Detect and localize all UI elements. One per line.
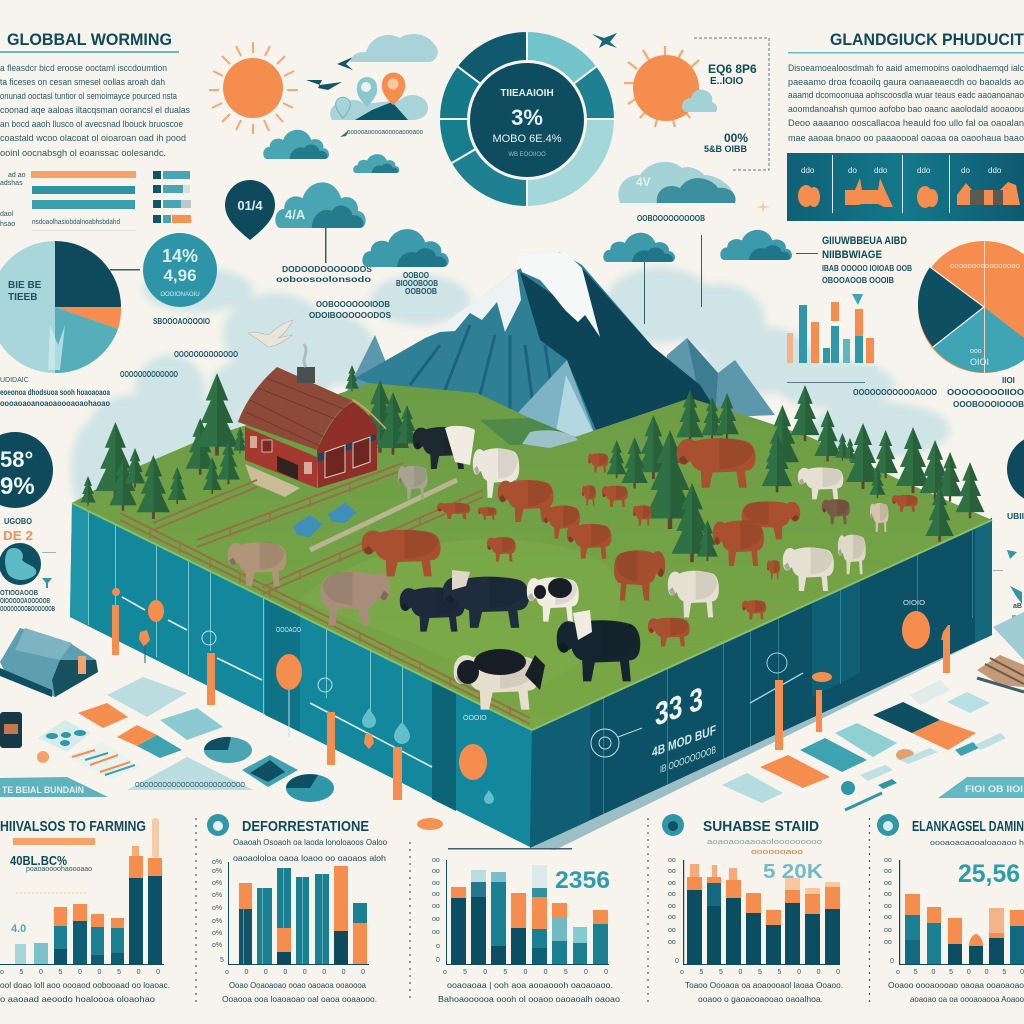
- chart panel 4: sustainable stand: oo: [668, 939, 676, 946]
- heading: right mid: IBAB OOOOO IOIOAB OOB: [822, 264, 912, 273]
- icon: orange sun left: [209, 42, 298, 134]
- small legend bars: [0, 171, 191, 231]
- chart panel 4: sustainable stand: oo: [668, 903, 676, 910]
- chart panel 3: 0: [436, 957, 440, 964]
- banner: lower left: TE BEIAL BUNDAIN: [2, 785, 84, 795]
- chart panel 2: deforestation: o%: [212, 868, 222, 875]
- barn: [238, 344, 386, 497]
- tractor: lower left: [0, 712, 22, 748]
- connector and labels under cloud: OOBOOB: [405, 287, 437, 296]
- cloud with percentage: 4/A: [285, 207, 306, 222]
- bars: [15, 818, 162, 965]
- chart panel 4: sustainable stand: 0: [675, 958, 679, 965]
- connector and labels under cloud: OOOOOOOOOOOOO: [174, 350, 238, 359]
- stats beside sun: [694, 38, 769, 170]
- chart panel 5: oo: [884, 903, 892, 910]
- separators: [196, 818, 870, 1003]
- chart panel 5: oo: [884, 880, 892, 887]
- label and globe: left edge: OOOOOOOOBOOOOOOB: [0, 606, 55, 613]
- stat circle and icons: right edge: [993, 435, 1024, 622]
- stats beside sun: EQ6 8P6: [708, 62, 757, 76]
- stats beside sun: 00%: [724, 131, 748, 145]
- cloud: pale top: [350, 34, 438, 62]
- pale cloud backdrop behind mountain: [71, 267, 950, 520]
- title: global warming: GLOBBAL WORMING: [7, 30, 172, 49]
- platform: left wall: [70, 503, 532, 848]
- chart panel 4: sustainable stand: o 5 5 0 5 5 0 0 0: [680, 969, 840, 976]
- left wall icons and pins: [112, 588, 494, 804]
- chart panel 2: deforestation: o%: [212, 905, 222, 912]
- cloud with map pins: [330, 72, 428, 120]
- chart panel 3: oo: [432, 857, 440, 864]
- right wall icons and pins: [750, 600, 950, 750]
- text block: right paragraph: [788, 63, 1024, 143]
- small vehicles: [293, 503, 357, 537]
- chart panel 3: oo: [432, 929, 440, 936]
- pie chart: left: [0, 241, 121, 373]
- chart panel 5: [877, 814, 1024, 1004]
- chart panel 1: invasion to farming: 40BL.BC%: [10, 853, 67, 868]
- chart panel 2: deforestation: o%: [212, 892, 222, 899]
- banner: livestock strip: ddo: [917, 166, 931, 175]
- chart panel 3: oo: [432, 891, 440, 898]
- donut chart: [439, 31, 615, 207]
- label under callout: SBOOOAOOOOIO: [153, 317, 210, 326]
- chart panel 3: oo: [432, 880, 440, 887]
- panel heading: SUHABSE STAIID: [703, 818, 819, 835]
- labels under left pie: eoeonoa dhodsuoa sooh hoaoaoaoa: [0, 388, 110, 397]
- pie chart: left: TIEEB: [8, 292, 37, 303]
- chart panel 4: sustainable stand: oo: [668, 927, 676, 934]
- right wall icons and pins: OIOIO: [903, 600, 926, 607]
- chart panel 3: o: [436, 943, 440, 950]
- chart panel 1: invasion to farming: [0, 818, 170, 1004]
- labels under left pie: oooaoaoanoaoaoooaoaohaoao: [0, 399, 110, 408]
- stat circle and icons: right edge: aB: [1013, 603, 1022, 610]
- chart panel 5: oooaoaoaooaloaoaoo h: [930, 840, 1024, 847]
- label and globe: left edge: UGOBO: [4, 517, 32, 526]
- text block: global warming paragraph: [0, 63, 190, 158]
- chart panel 3: oo: [432, 916, 440, 923]
- label and globe: left edge: [0, 517, 56, 613]
- stat circle and icons: right edge: UBII: [1007, 512, 1024, 521]
- pie chart: right: oooooooooooooooo: [950, 263, 1020, 270]
- stat circle: left edge: 9%: [0, 473, 35, 500]
- label and globe: left edge: OTIOOAOOB: [0, 590, 38, 597]
- heading: right mid: OBOOAOOB OOOIB: [822, 276, 894, 285]
- labels under right pie: OOOOOOOOOOOAOOO: [853, 388, 937, 397]
- text block: global warming paragraph: coonad aqe aaloas iltacqsman oorancsl el dualas: [0, 105, 190, 115]
- panel heading: HIIVALSOS TO FARMING: [0, 818, 146, 835]
- platform: right wall: [530, 518, 1010, 850]
- banner: lower left: [0, 777, 108, 797]
- pie chart: right: OIOI: [970, 357, 989, 367]
- chart panel 5: oo: [884, 857, 892, 864]
- chart panel 5: oo: [884, 927, 892, 934]
- banner: lower right: [938, 777, 1024, 798]
- labels under right pie: IIOI: [1002, 376, 1015, 385]
- connector and labels under cloud: ODOIBOOOOOODOS: [309, 311, 392, 320]
- chart panel 4: sustainable stand: ooooooaoo: [751, 849, 803, 856]
- chart panel 3: oo: [432, 868, 440, 875]
- chart panel 3: oo: [432, 903, 440, 910]
- left wall icons and pins: OOOAOO: [276, 627, 301, 634]
- chart panel 4: sustainable stand: Toaoo Oooaoa oa aoaoooaol laoaa Ooaoo.: [685, 980, 843, 990]
- text block: global warming paragraph: ooinl oocnabsgh ol eoanssac oolesandc.: [0, 148, 166, 158]
- banner: lower right: FIOI OB IIOI: [965, 784, 1023, 794]
- chart panel 1: invasion to farming: poaoaoooohaoooaao: [26, 866, 92, 873]
- chart panel 2: deforestation: o%: [212, 859, 222, 866]
- icon ring: [877, 814, 899, 836]
- chart panel 3: Bahoaoooooa oooh ol ooaoo oaoaoalh oaoao: [438, 994, 620, 1004]
- chart panel 5: Ooaoo oooaoooao oaoaa ooaoaoao: [888, 980, 1024, 990]
- connector lines under clouds: [644, 235, 818, 324]
- donut chart: 3%: [511, 105, 543, 130]
- stats beside sun: E..IOIO: [710, 76, 744, 87]
- labels under right pie: OOOOOOOOIIOO: [947, 388, 1024, 397]
- decorative sparkle: [756, 200, 770, 214]
- icon ring: [207, 814, 229, 836]
- icon: birds: [306, 57, 353, 90]
- banner: livestock strip: [787, 153, 1024, 221]
- bars: [451, 865, 608, 965]
- stats beside sun: 5&B OIBB: [704, 144, 748, 154]
- mountains: [345, 252, 775, 445]
- small legend bars: adshas: [0, 180, 23, 187]
- labels under left pie: UDIDAIC: [0, 377, 29, 384]
- label and globe: left edge: OIOOOOOAOOOOOB: [0, 598, 50, 605]
- documents: lower left: OOOOOOOOOOOOOOOOOOOOOOOO: [135, 782, 245, 789]
- documents: lower right: [722, 680, 1006, 810]
- connector line: [110, 269, 140, 270]
- chart panel 2: deforestation: oaoaololoa oaoa loaoo oo oaoaos aloh: [233, 853, 386, 863]
- text block: global warming paragraph: ta ficeses on cesan smesel oollas aroah dah: [0, 77, 165, 87]
- label under wide cloud: OOBOOOOOOOOOB: [637, 214, 705, 223]
- chart panel 2: deforestation: Oaaoah Osoaoh oa laoda lonoloaoos Oaloo: [233, 837, 387, 847]
- location pin callout: [225, 180, 275, 240]
- banner: livestock strip: do: [961, 166, 970, 175]
- chart panel 5: oo: [884, 939, 892, 946]
- chart panel 1: invasion to farming: 4.0: [11, 923, 26, 935]
- banner: livestock strip: do: [848, 166, 857, 175]
- chart panel 2: deforestation: o%: [212, 880, 222, 887]
- chart panel 4: sustainable stand: [662, 814, 843, 1004]
- wall text: 33 3: 33 3: [655, 680, 703, 734]
- cloud: small right: [353, 154, 399, 173]
- chart panel 4: sustainable stand: oo: [668, 891, 676, 898]
- chart panel 2: deforestation: o%: [212, 942, 222, 949]
- text block: global warming paragraph: a fleasdcr bicd eroose ooctaml isccdoumtion: [0, 63, 167, 73]
- connector and labels under cloud: OOBOOOOOOIOOB: [316, 300, 390, 309]
- icon: airplane: [592, 33, 617, 48]
- big stat: 2356: [555, 867, 610, 894]
- text block: right paragraph: paeaamo droa fcoaoilq gaura oanaaeaecdh oo baoalds ao: [788, 77, 1024, 87]
- labels under right pie: [853, 376, 1024, 409]
- banner: livestock strip: ddo: [988, 166, 1002, 175]
- dotted label line under pins: oooooaooooaooooaoooaoo: [347, 129, 423, 136]
- chart panel 4: sustainable stand: oo: [668, 868, 676, 875]
- chart panel 3: [432, 848, 620, 1004]
- chart panel 3: ooaoaoaa | ooh aoa aooaoooh oaoaoaoo.: [447, 980, 613, 990]
- big stat: 25,56: [958, 860, 1020, 888]
- connector and labels under cloud: DODOODOOOOODOS: [282, 265, 373, 274]
- icon: orange sun right with cloud: [624, 46, 717, 127]
- chart panel 3: o 5 0 5 0 0 5 0 0: [443, 969, 608, 976]
- chart panel 2: deforestation: o 0 0 0 0 0 0 0: [225, 969, 365, 976]
- cows: black and white: [400, 426, 640, 710]
- callout circle: 14%: 4,96: [163, 266, 197, 285]
- chart panel 5: o 5 0 5 0 0 5 0: [896, 969, 1024, 976]
- connector and labels under cloud: OOBOO: [403, 271, 429, 280]
- bird in sky: [248, 320, 293, 347]
- connector and labels under cloud: [120, 228, 438, 379]
- chart panel 5: oo: [884, 891, 892, 898]
- wall text: 33 3: [591, 680, 716, 776]
- text block: right paragraph: mae aaoaa bnaoo oo paaaoooal oaoaa oa oaoohaua baao: [788, 133, 1024, 143]
- heading: right mid: [822, 235, 912, 285]
- chart panel 2: deforestation: Ooao Ooaoaoao ooao oaoaoa ooaoooa: [229, 980, 366, 990]
- chart panel 5: oo: [884, 868, 892, 875]
- labels under left pie: [0, 377, 110, 408]
- chart panel 1: invasion to farming: o aaoaad aeoodo hoaloooa oloaohao: [0, 994, 155, 1004]
- left wall icons and pins: OOOIO: [463, 715, 487, 722]
- connector and labels under cloud: BIOOOBOOB: [396, 279, 438, 288]
- heading: right mid: NIIBBWIAGE: [822, 249, 882, 261]
- cows: herd: [228, 438, 918, 646]
- stat circle and icons: right edge: IIO: [1012, 615, 1022, 622]
- clouds: mid row right: [603, 230, 792, 262]
- chart panel 2: deforestation: o%: [212, 930, 222, 937]
- trees: left and right groves: [80, 365, 984, 562]
- bars: [239, 866, 367, 965]
- small legend bars: daol: [0, 211, 14, 218]
- cloud: wide: [618, 162, 736, 203]
- stat overlay: 5 20K: [763, 861, 824, 883]
- small legend bars: hsao: [0, 221, 15, 228]
- cloud: wide: 4V: [636, 175, 651, 189]
- donut chart: TIIEAAIOIH: [500, 88, 554, 99]
- banner: livestock strip: ddo: [874, 166, 888, 175]
- bars: [687, 864, 840, 965]
- donut chart: MOBO 6E.4%: [492, 133, 562, 145]
- panel heading: DEFORRESTATIONE: [242, 818, 369, 835]
- banner: livestock strip: ddo: [801, 166, 815, 175]
- heading: right mid: GIIUWBBEUA AIBD: [822, 235, 907, 247]
- chart panel 5: oo: [884, 914, 892, 921]
- chart panel 2: deforestation: [207, 814, 387, 1004]
- wall text: 33 3: IB OOOOOOOOB: [660, 745, 716, 776]
- stat circle: left edge: [0, 432, 53, 508]
- small legend bars: nsdoaolhasiobdalnoabhsbdahd: [32, 219, 120, 226]
- cloud: small: [263, 130, 329, 159]
- text block: right paragraph: Deoo aaaanoo ooscallacoa heauld foo ullo fal oa oaoalan: [788, 118, 1024, 128]
- stat circle: left edge: 58°: [0, 447, 33, 472]
- connector and labels under cloud: ooboosoolonsodo: [276, 275, 371, 284]
- connector and labels under cloud: OOOOOOOOOOOOO: [120, 370, 178, 379]
- farm paths and fences: [120, 463, 530, 724]
- documents: lower left: [37, 677, 443, 830]
- bars: [905, 894, 1024, 965]
- chart panel 1: invasion to farming: o 5 0 5 0 0 5 0 0: [0, 969, 160, 976]
- chart panel 4: sustainable stand: oo: [668, 857, 676, 864]
- pie chart: left: BIE BE: [8, 280, 42, 291]
- pie chart: right: ooo: [970, 348, 982, 355]
- chart panel 4: sustainable stand: oo: [668, 880, 676, 887]
- chart panel 5: 0: [890, 958, 894, 965]
- text block: global warming paragraph: onunad ooctasl tuntior ol semoimayce pourced nsta: [0, 91, 177, 101]
- chart panel 2: deforestation: Ooaooa ooa loaoaoao oal oaoa ooaaooo.: [222, 994, 377, 1004]
- location pin callout: 01/4: [237, 198, 263, 213]
- farm machinery: lower right: [977, 612, 1024, 692]
- pie chart: right: [918, 241, 1024, 373]
- chart panel 4: sustainable stand: oo: [668, 914, 676, 921]
- labels under right pie: OOOBOOOIOOOB: [953, 400, 1024, 409]
- callout circle: 14%: [143, 233, 217, 307]
- icon ring: [662, 814, 684, 836]
- chart panel 2: deforestation: 5: [220, 957, 224, 964]
- chart panel 1: invasion to farming: ool doao loll aoo oooaod oobooaad oo loaoac.: [0, 980, 170, 990]
- callout circle: 14%: OOOIONAOIU: [160, 292, 200, 298]
- callout circle: 14%: 14%: [162, 246, 198, 266]
- chart panel 2: deforestation: o%: [212, 918, 222, 925]
- platform: green field: [72, 383, 992, 730]
- donut chart: WB EOOIIOO: [508, 152, 546, 158]
- field shading: [72, 418, 992, 730]
- label and globe: left edge: DE 2: [3, 528, 33, 543]
- chart panel 4: sustainable stand: aoaoaooaaoaolooooooooo: [707, 839, 822, 846]
- small legend bars: ad ao: [8, 172, 26, 179]
- cloud: medium centre: [362, 229, 449, 267]
- text block: global warming paragraph: an bocd aaoh llusco ol avecsnad lbouck bruoscoe: [0, 119, 183, 129]
- text block: global warming paragraph: coastald wcoo olacoat ol oioaroan oad ih pood: [0, 133, 186, 143]
- farm building: lower left: [0, 628, 98, 697]
- chart panel 4: sustainable stand: ooaoo o gaoaooaooao oaoalhoa.: [698, 994, 823, 1004]
- bar chart: right mid: [787, 294, 877, 383]
- cloud with percentage: [275, 182, 366, 228]
- wall text: 33 3: 4B MOD BUF: [652, 722, 716, 760]
